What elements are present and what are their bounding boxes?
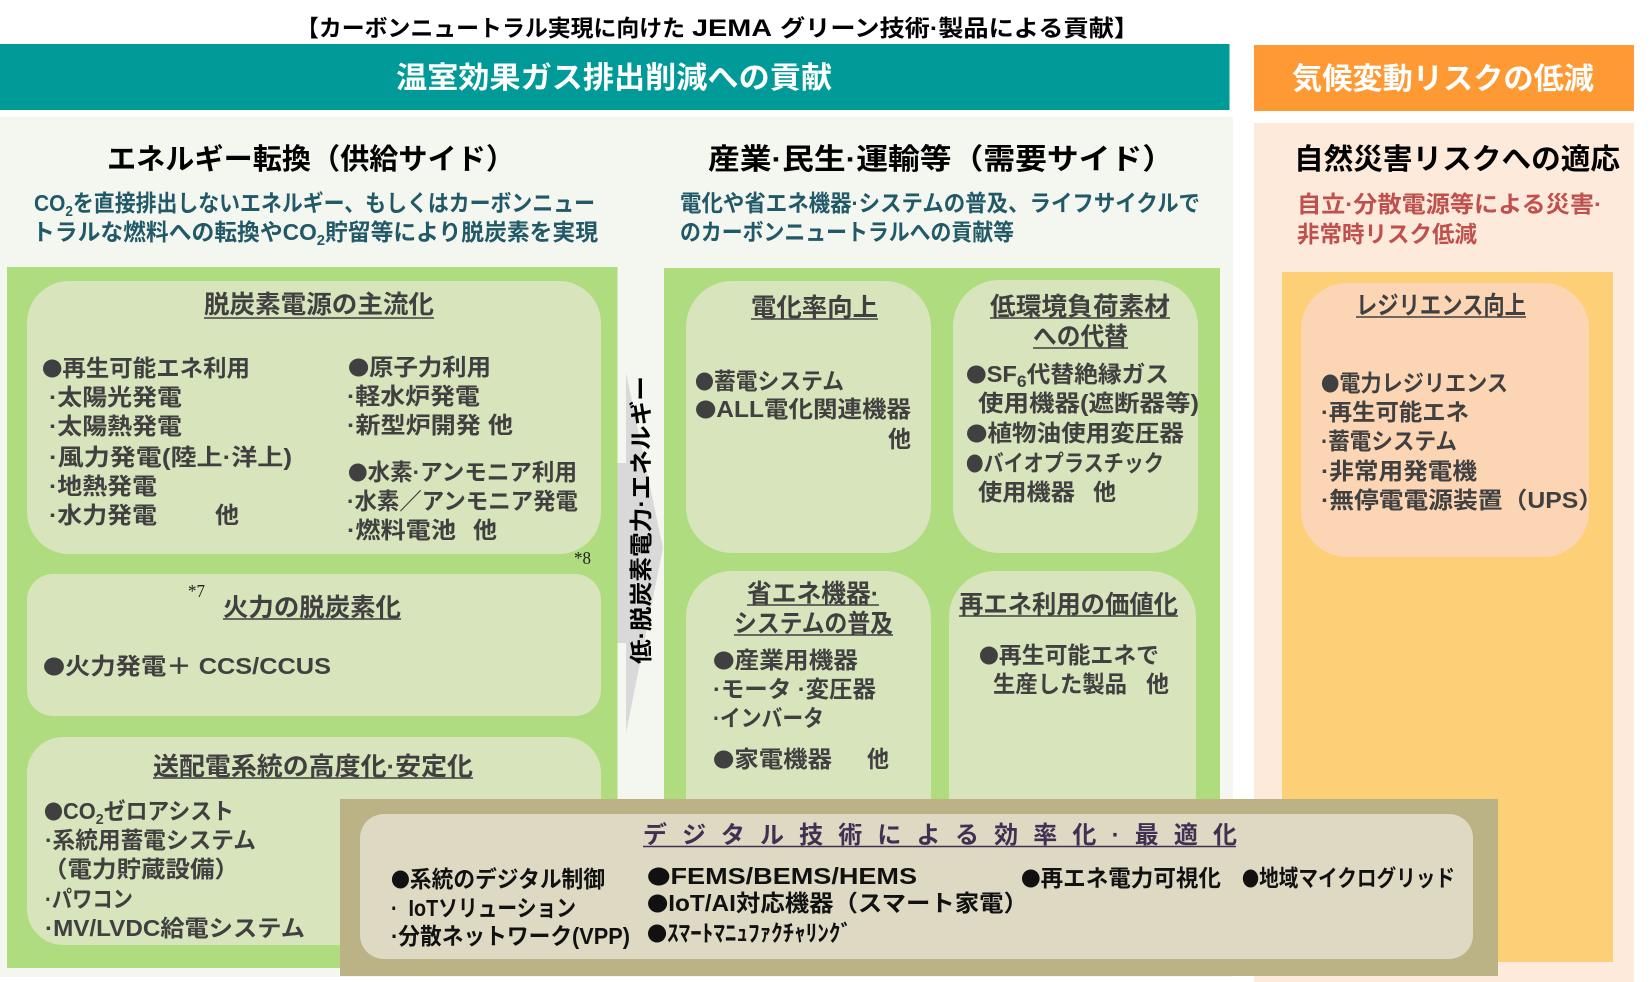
list: energy management: ●IoT/AI対応機器（スマート家電） bbox=[647, 888, 1028, 917]
panel: decarbonized thermal power bbox=[27, 574, 601, 716]
list: ●植物油使用変圧器 bbox=[966, 418, 1184, 447]
heading bbox=[734, 580, 893, 638]
list: hydrogen and ammonia: 他 bbox=[473, 517, 497, 543]
list: ·無停電電源装置（UPS） bbox=[1321, 487, 1603, 513]
panel: resilience improvement bbox=[1301, 283, 1603, 557]
panel: low environmental impact materials bbox=[953, 280, 1199, 553]
list: ·MV/LVDC給電システム bbox=[45, 915, 305, 941]
page title: 【カーボンニュートラル実現に向けた bbox=[296, 15, 685, 41]
list: renewable energy: ●再生可能エネ利用 bbox=[42, 353, 250, 382]
list: 他 bbox=[1146, 671, 1169, 697]
text block: supply side description: 貯留等により脱炭素を実現 bbox=[325, 219, 598, 245]
list: ●蓄電システム bbox=[695, 366, 844, 395]
list: ●CO bbox=[44, 796, 98, 825]
banner: climate risk reduction bbox=[1254, 45, 1634, 111]
list bbox=[979, 640, 1169, 697]
heading: への代替 bbox=[1033, 323, 1128, 351]
panel: resilience yellow area bbox=[1282, 272, 1613, 962]
text block: demand side description bbox=[680, 190, 1200, 245]
banner: greenhouse gas reduction: 温室効果ガス排出削減への貢献 bbox=[396, 62, 832, 95]
list: ●再生可能エネで bbox=[979, 640, 1159, 669]
list: ·非常用発電機 bbox=[1321, 458, 1477, 484]
list: ·インバータ bbox=[713, 705, 824, 731]
list item: renewable power visualization: ●再エネ電力可視化 bbox=[1021, 863, 1221, 892]
list item: local microgrid: ●地域マイクログリッド bbox=[1242, 863, 1455, 892]
list: 2 bbox=[96, 811, 104, 828]
list: grid digital control: ·分散ネットワーク(VPP) bbox=[391, 923, 630, 949]
text block: disaster description: 非常時リスク低減 bbox=[1297, 221, 1477, 247]
list bbox=[1321, 368, 1603, 513]
panel: supply side green area bbox=[7, 267, 618, 968]
heading: 省エネ機器· bbox=[747, 580, 879, 608]
panel: advanced transmission and distribution bbox=[27, 737, 601, 945]
list: ゼロアシスト bbox=[104, 798, 234, 824]
text block: disaster description: 自立·分散電源等による災害· bbox=[1297, 191, 1602, 217]
list: nuclear bbox=[347, 352, 513, 438]
panel: energy saving equipment bbox=[686, 571, 931, 808]
text block: supply side description: 2 bbox=[65, 203, 73, 220]
page title: JEMA bbox=[692, 15, 772, 42]
heading: 再エネ利用の価値化 bbox=[959, 591, 1178, 619]
text block: demand side description: 電化や省エネ機器·システムの普及、ライフサイクルで bbox=[680, 190, 1200, 216]
list: 使用機器 bbox=[978, 479, 1075, 505]
list: 他 bbox=[888, 426, 911, 452]
list: energy management: ●ｽﾏｰﾄﾏﾆｭﾌｧｸﾁｬﾘﾝｸﾞ bbox=[647, 918, 852, 947]
list: ·パワコン bbox=[45, 886, 133, 912]
list: renewable energy: ·地熱発電 bbox=[49, 473, 157, 499]
list bbox=[43, 796, 305, 941]
list: hydrogen and ammonia: ·水素／アンモニア発電 bbox=[347, 488, 578, 514]
list: renewable energy: ·太陽光発電 bbox=[49, 384, 182, 410]
panel: demand side green area bbox=[664, 268, 1220, 808]
list: 生産した製品 bbox=[993, 671, 1127, 697]
list: energy management bbox=[647, 861, 1028, 947]
list: energy management: ●FEMS/BEMS/HEMS bbox=[647, 861, 917, 890]
list: ·系統用蓄電システム bbox=[45, 827, 256, 853]
list bbox=[695, 366, 911, 452]
list bbox=[966, 359, 1199, 505]
list: 使用機器(遮断器等) bbox=[978, 390, 1199, 416]
panel: digital efficiency and optimization bbox=[340, 799, 1498, 976]
text block: supply side description: CO bbox=[34, 190, 68, 216]
list: renewable energy bbox=[42, 353, 292, 528]
panel: climate adaptation background bbox=[1254, 123, 1634, 982]
list: 6 bbox=[1017, 372, 1027, 391]
arrow: low and zero carbon energy bbox=[618, 373, 663, 733]
footnote mark 7: *7 bbox=[188, 581, 205, 601]
page title: グリーン技術·製品による貢献】 bbox=[780, 15, 1139, 41]
heading: 低環境負荷素材 bbox=[990, 293, 1170, 321]
list: nuclear: ·軽水炉発電 bbox=[347, 383, 480, 409]
list: grid digital control: ●系統のデジタル制御 bbox=[391, 864, 605, 893]
panel: electrification rate bbox=[686, 281, 931, 553]
heading: 火力の脱炭素化 bbox=[223, 594, 401, 622]
list item: ●火力発電＋ CCS/CCUS bbox=[43, 651, 331, 680]
text block: supply side description: 2 bbox=[317, 232, 325, 249]
list: 代替絶縁ガス bbox=[1027, 361, 1169, 387]
panel: greenhouse gas background bbox=[0, 117, 1233, 977]
text block: supply side description: を直接排出しないエネルギー、もしくはカーボンニュー bbox=[73, 190, 595, 216]
arrow: low and zero carbon energy: 低·脱炭素電力·エネルギー bbox=[628, 376, 654, 664]
heading bbox=[990, 293, 1170, 351]
list: renewable energy: ·風力発電(陸上·洋上) bbox=[49, 444, 292, 470]
list: hydrogen and ammonia: ·燃料電池 bbox=[347, 517, 456, 543]
list: renewable energy: 他 bbox=[215, 502, 239, 528]
text block: disaster description bbox=[1297, 191, 1602, 247]
list: ●電力レジリエンス bbox=[1321, 368, 1508, 397]
list: ●SF bbox=[966, 359, 1016, 388]
list: renewable energy: ·太陽熱発電 bbox=[49, 413, 182, 439]
heading: supply side: エネルギー転換（供給サイド） bbox=[107, 143, 515, 176]
panel: mainstream decarbonized power bbox=[27, 281, 601, 554]
heading: レジリエンス向上 bbox=[1356, 292, 1526, 320]
heading: natural disaster adaptation: 自然災害リスクへの適応 bbox=[1294, 143, 1620, 176]
list bbox=[713, 645, 889, 773]
text block: demand side description: のカーボンニュートラルへの貢献等 bbox=[680, 219, 1014, 245]
heading: システムの普及 bbox=[734, 610, 893, 638]
list: ●産業用機器 bbox=[713, 645, 858, 674]
list: ●家電機器 bbox=[713, 744, 832, 773]
list: ·モータ ·変圧器 bbox=[713, 676, 876, 702]
list: renewable energy: ·水力発電 bbox=[49, 502, 157, 528]
heading: 送配電系統の高度化·安定化 bbox=[153, 753, 473, 781]
banner: greenhouse gas reduction bbox=[0, 44, 1230, 110]
text block: supply side description: トラルな燃料への転換やCO bbox=[32, 219, 320, 245]
footnote mark 8: *8 bbox=[574, 548, 591, 568]
banner: climate risk reduction: 気候変動リスクの低減 bbox=[1292, 63, 1594, 96]
heading: demand side: 産業·民生·運輸等（需要サイド） bbox=[708, 143, 1174, 176]
page title bbox=[296, 15, 1139, 42]
list: nuclear: ●原子力利用 bbox=[348, 352, 491, 381]
list: grid digital control: · IoTソリューション bbox=[391, 895, 576, 921]
heading: 電化率向上 bbox=[751, 294, 878, 322]
list: hydrogen and ammonia: ●水素·アンモニア利用 bbox=[348, 457, 577, 486]
panel: renewable energy value bbox=[949, 571, 1196, 808]
list: 他 bbox=[1093, 479, 1116, 505]
text block: supply side description bbox=[32, 190, 598, 249]
list: nuclear: ·新型炉開発 他 bbox=[347, 412, 513, 438]
list: ·再生可能エネ bbox=[1321, 399, 1469, 425]
heading: デジタル技術による効率化·最適化 bbox=[643, 821, 1237, 849]
list: ●バイオプラスチック bbox=[966, 448, 1164, 477]
list: ·蓄電システム bbox=[1321, 428, 1457, 454]
list: 他 bbox=[867, 746, 889, 772]
list: hydrogen and ammonia bbox=[347, 457, 578, 543]
heading: 脱炭素電源の主流化 bbox=[204, 291, 434, 319]
list: （電力貯蔵設備） bbox=[43, 856, 239, 882]
list: grid digital control bbox=[391, 864, 630, 949]
list: ●ALL電化関連機器 bbox=[695, 394, 911, 423]
